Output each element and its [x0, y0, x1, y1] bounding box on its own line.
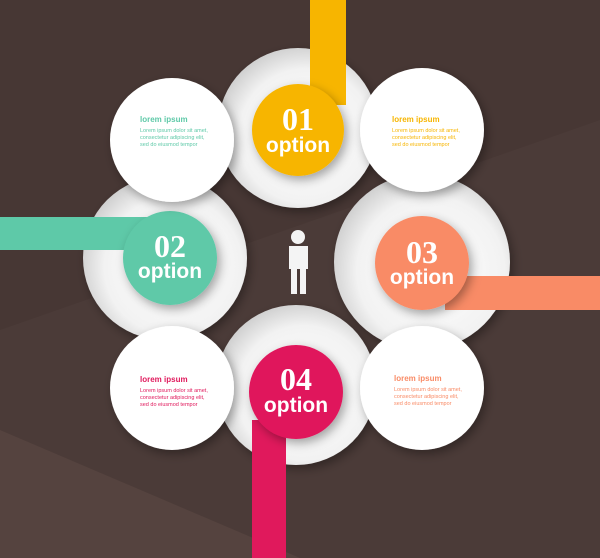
small circle: bottom-right text: consectetur adipiscing elit,	[394, 394, 459, 400]
small circle: bottom-left text: lorem ipsum	[140, 375, 188, 384]
small circle: top-left text: lorem ipsum	[140, 115, 188, 124]
small circle: top-right text: lorem ipsum	[392, 115, 440, 124]
option 01: 01	[282, 101, 314, 137]
small circle: bottom-right text: sed do eiusmod tempor	[394, 401, 452, 407]
small circle: bottom-left text: Lorem ipsum dolor sit amet,	[140, 388, 208, 394]
small circle: bottom-right text: Lorem ipsum dolor sit amet,	[394, 387, 462, 393]
option 04: 04	[280, 361, 312, 397]
big circles	[83, 48, 510, 465]
small circle: top-right text	[360, 68, 484, 192]
option 02	[123, 211, 217, 305]
option 02: option	[138, 260, 202, 283]
ribbon: teal	[0, 217, 150, 250]
small circle: top-left text: consectetur adipiscing elit,	[140, 135, 205, 141]
ribbon: crimson	[252, 420, 286, 558]
small circle: bottom-right text	[360, 326, 484, 450]
small circle: bottom-left text: consectetur adipiscing elit,	[140, 395, 205, 401]
option 04: option	[264, 394, 328, 417]
small circle: top-left text	[110, 78, 234, 202]
person icon	[289, 230, 308, 294]
small circle: bottom-right text: lorem ipsum	[394, 374, 442, 383]
small circle: top-left text: sed do eiusmod tempor	[140, 142, 198, 148]
small circle: bottom-left text: sed do eiusmod tempor	[140, 402, 198, 408]
small circle: top-right text: sed do eiusmod tempor	[392, 142, 450, 148]
option 04	[249, 345, 343, 439]
option 01: option	[266, 134, 330, 157]
option 02: 02	[154, 228, 186, 264]
option 03: option	[390, 266, 454, 289]
option 03: 03	[406, 234, 438, 270]
ribbon: yellow	[310, 0, 346, 105]
option 03	[375, 216, 469, 310]
ribbon: orange	[445, 276, 600, 310]
option 01	[252, 84, 344, 176]
small circle: top-right text: consectetur adipiscing elit,	[392, 135, 457, 141]
small circle: top-right text: Lorem ipsum dolor sit amet,	[392, 128, 460, 134]
small circle: top-left text: Lorem ipsum dolor sit amet,	[140, 128, 208, 134]
small circle: bottom-left text	[110, 326, 234, 450]
